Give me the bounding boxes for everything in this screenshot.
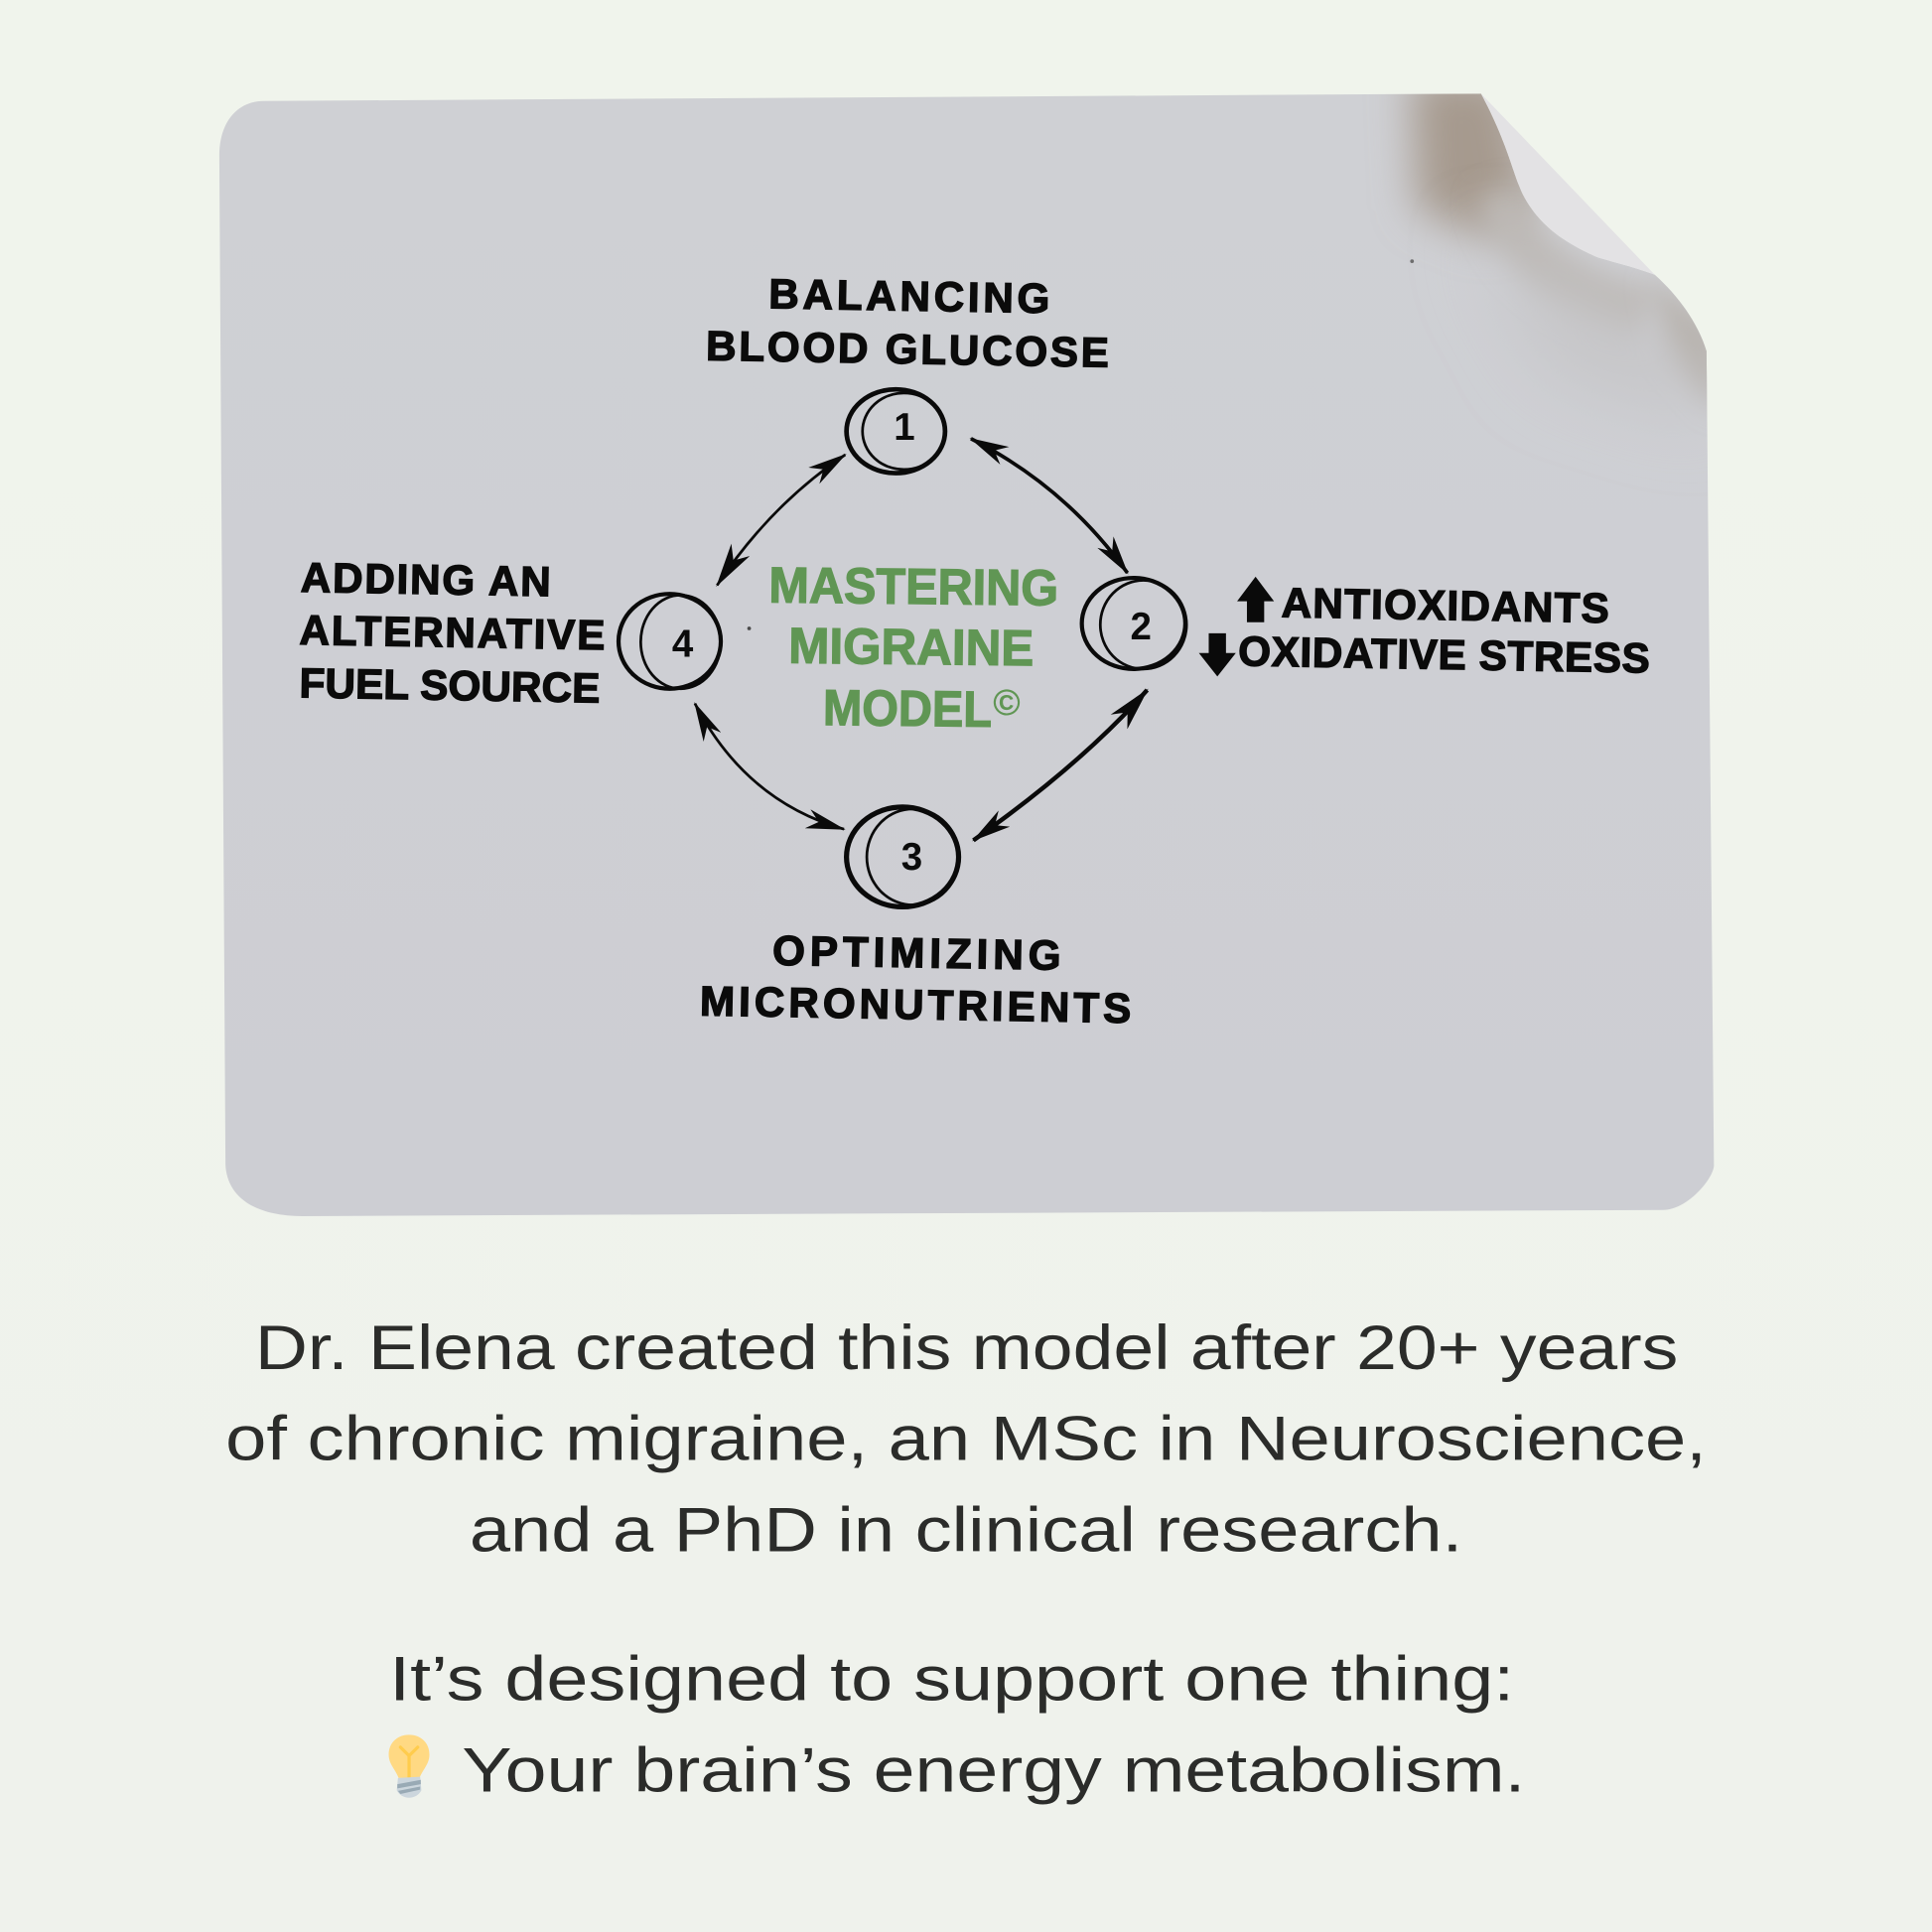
step 3 circle: 3	[901, 836, 922, 879]
arrow 3 to 4	[695, 704, 844, 829]
oxidative stress text: OXIDATIVE STRESS	[1238, 627, 1650, 682]
arrow 2 to 3	[973, 690, 1147, 840]
arrow 1 to 2	[971, 439, 1128, 573]
text block: purpose	[389, 1645, 1525, 1806]
curl shadows	[1411, 73, 1719, 419]
step 3 label	[700, 927, 1132, 1032]
step 2 circle: 2	[1131, 606, 1152, 648]
text block: purpose: Your brain’s energy metabolism.	[462, 1736, 1525, 1806]
icon: up arrow	[1237, 577, 1274, 622]
step 4 label: FUEL SOURCE	[299, 659, 601, 712]
text block: purpose: It’s designed to support one thing:	[389, 1645, 1514, 1715]
step 3 label: MICRONUTRIENTS	[700, 978, 1132, 1032]
centre title: ©	[993, 681, 1021, 723]
text block: about the model: and a PhD in clinical research.	[470, 1496, 1462, 1566]
text block: about the model	[225, 1313, 1707, 1566]
text block: about the model: Dr. Elena created this model after 20+ years	[255, 1313, 1678, 1383]
step 4 circle: 4	[672, 622, 694, 665]
folded corner flap	[1481, 93, 1655, 275]
step 3 label: OPTIMIZING	[772, 927, 1061, 979]
icon: light bulb	[389, 1734, 430, 1798]
paper sheet	[219, 93, 1714, 1216]
speck	[1410, 259, 1414, 263]
panel: curled paper sticker	[219, 73, 1719, 1216]
text block: about the model: of chronic migraine, an MSc in Neuroscience,	[225, 1405, 1707, 1474]
step 3 circle	[847, 807, 959, 906]
step 2 circle	[1082, 578, 1186, 669]
step 1 label	[706, 270, 1109, 376]
speck centre	[748, 626, 751, 630]
centre title: MASTERING	[768, 557, 1058, 617]
step 4 label	[299, 554, 606, 712]
step 1 label: BALANCING	[768, 270, 1050, 322]
centre title	[768, 557, 1058, 738]
step 2 label	[1199, 577, 1650, 682]
step 4 label: ALTERNATIVE	[299, 607, 606, 658]
arrow 4 to 1	[717, 455, 845, 586]
step 1 circle	[847, 389, 945, 474]
icon: down arrow	[1199, 633, 1236, 676]
step 4 circle	[619, 594, 721, 689]
step 1 circle: 1	[894, 406, 915, 449]
diagram: mastering migraine cycle	[299, 270, 1650, 1032]
step 4 label: ADDING AN	[300, 554, 551, 605]
centre title: MIGRAINE	[788, 618, 1035, 676]
centre title: MODEL	[823, 679, 992, 738]
step 1 label: BLOOD GLUCOSE	[706, 323, 1109, 376]
antioxidants text: ANTIOXIDANTS	[1281, 579, 1609, 631]
